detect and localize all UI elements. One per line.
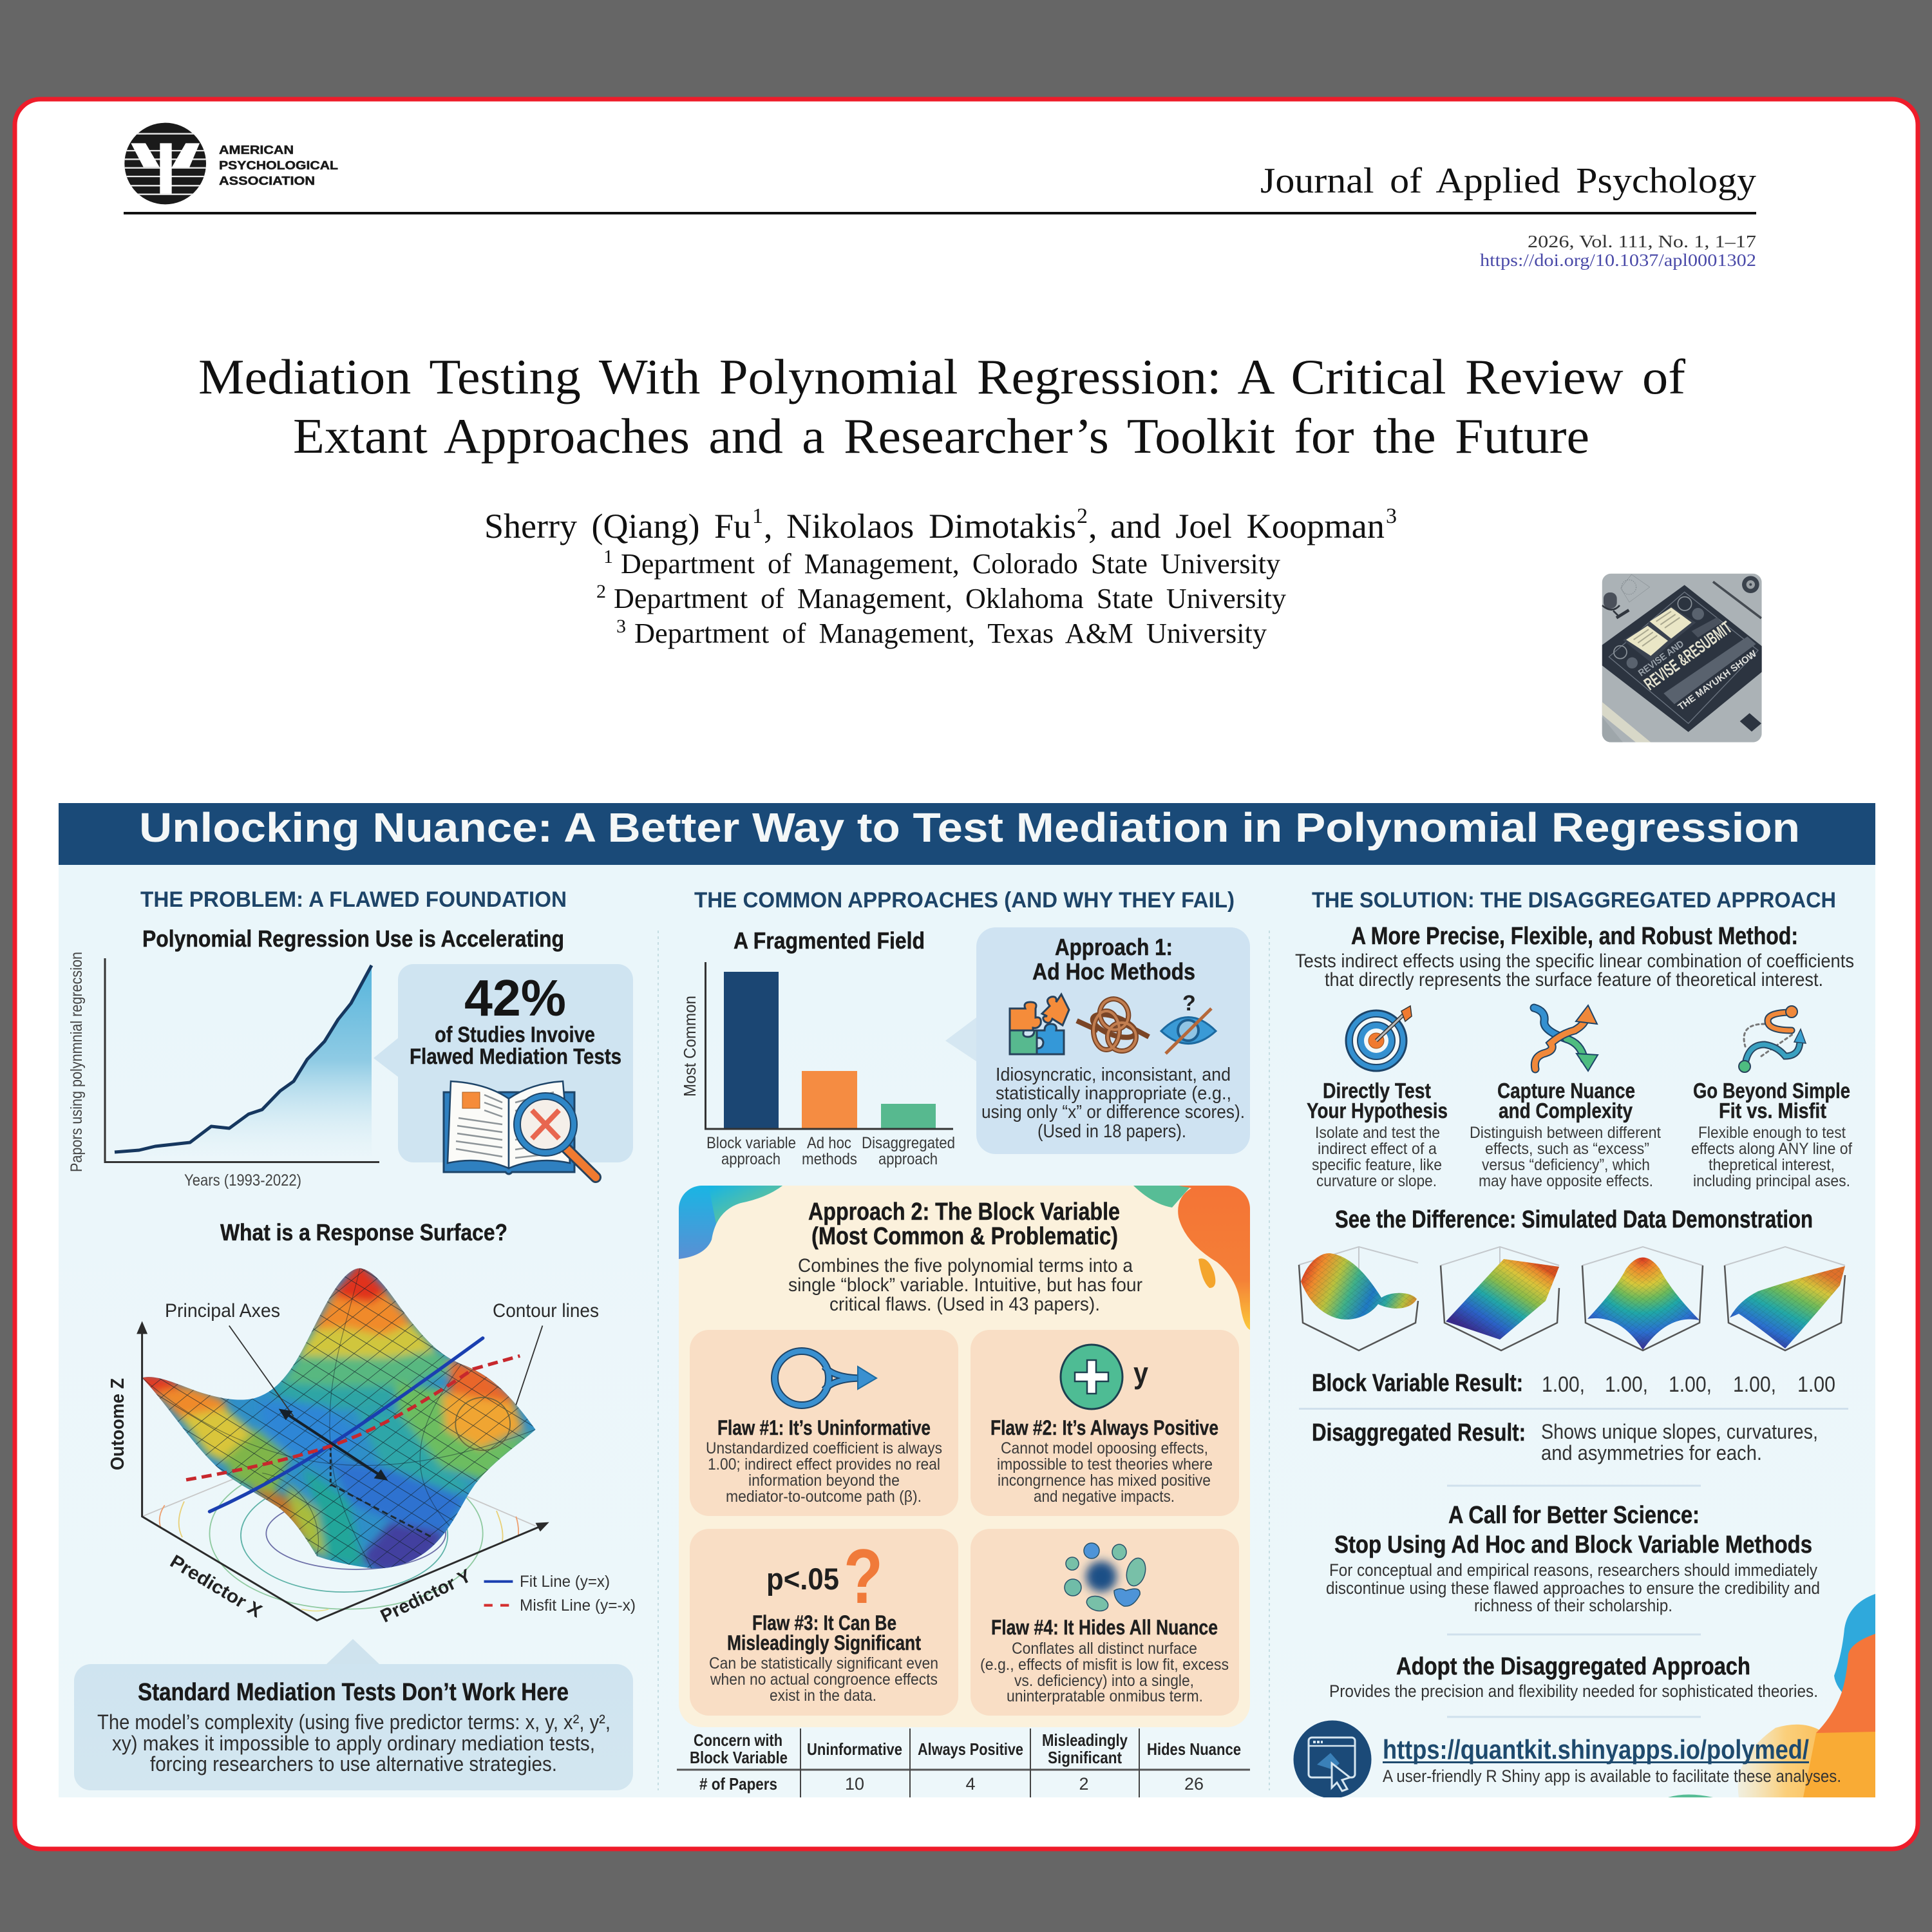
results: block variable: 1.00 — [1797, 1372, 1835, 1397]
heading: the problem: THE PROBLEM: A FLAWED FOUNDATION — [140, 887, 567, 912]
results: block variable — [1312, 1370, 1835, 1397]
line chart: polynomial regression use: Papors using polynmnial regrecsion — [68, 952, 86, 1172]
card: flaw 1 — [690, 1330, 958, 1516]
card: flaw 4: Flaw #4: It Hides All Nuance — [991, 1616, 1218, 1639]
table: concerns with block variable: Uninformative — [807, 1739, 902, 1759]
text block: a call for better science: richness of their scholarship. — [1474, 1596, 1672, 1615]
icon: p<.05 question mark: p<.05 — [766, 1562, 839, 1596]
article title: Extant Approaches and a Researcher’s Toolkit for the Future — [293, 408, 1589, 464]
callout: standard mediation tests: Standard Mediation Tests Don’t Work Here — [138, 1679, 569, 1706]
panel: approach 2: Approach 2: The Block Variable — [808, 1198, 1120, 1226]
icon: tangled knot — [1077, 995, 1149, 1051]
benefit: capture nuance: Distinguish between different — [1470, 1124, 1661, 1142]
bar chart: a fragmented field: Ad hoc — [807, 1134, 851, 1152]
intro text: that directly represents the surface feature of theoretical interest. — [1325, 969, 1823, 990]
chart: 3D response surface: Predictor X — [166, 1551, 266, 1622]
results: disaggregated: Shows unique slopes, curvatures, — [1541, 1420, 1818, 1443]
card: flaw 1: 1.00; indirect effect provides no real — [708, 1455, 940, 1473]
benefit: directly test: curvature or slope. — [1316, 1172, 1437, 1190]
icon: plus sign with y: y — [1133, 1356, 1148, 1390]
callout: 42%: 42% — [464, 969, 566, 1027]
callout: 42%: Flawed Mediation Tests — [410, 1045, 621, 1069]
bar chart: a fragmented field: Most Common — [680, 996, 699, 1097]
panel: approach 2 — [679, 1186, 1250, 1727]
icon: crossing arrows — [1534, 1005, 1598, 1071]
text block: adopt the disaggregated approach: Provides the precision and flexibility needed for sophisticated theories. — [1329, 1681, 1818, 1701]
icon: p<.05 question mark — [766, 1533, 883, 1620]
table: concerns with block variable: Misleadingly — [1042, 1730, 1128, 1750]
journal name: Journal of Applied Psychology — [1260, 161, 1756, 201]
text block: a call for better science — [1326, 1502, 1820, 1615]
benefit: go beyond: effects along ANY line of — [1691, 1140, 1852, 1158]
callout: approach 1: Idiosyncratic, inconsistant, and — [996, 1065, 1231, 1085]
card: flaw 4: (e.g., effects of misfit is low fit, excess — [980, 1656, 1229, 1674]
volume line: 2026, Vol. 111, No. 1, 1–17 — [1528, 232, 1756, 251]
benefit: capture nuance — [1470, 1005, 1661, 1190]
benefit: capture nuance: Capture Nuance — [1497, 1079, 1635, 1103]
authors: 3 — [1386, 504, 1397, 528]
icon: target with arrow — [1346, 1006, 1412, 1071]
callout: approach 1: using only “x” or difference scores). — [981, 1102, 1245, 1122]
card: flaw 3: Misleadingly Significant — [727, 1631, 921, 1654]
panel: the problem — [68, 887, 636, 1790]
callout: standard mediation tests — [74, 1639, 633, 1790]
heading: see the difference: See the Difference: Simulated Data Demonstration — [1335, 1206, 1813, 1233]
callout: standard mediation tests: xy) makes it impossible to apply ordinary mediation tests, — [112, 1732, 595, 1755]
card: flaw 4: vs. deficiency) into a single, — [1014, 1672, 1194, 1690]
decoration: bottom-right colour blobs — [1668, 1594, 1875, 1797]
table: concerns with block variable: Always Positive — [918, 1739, 1023, 1759]
results: block variable: 1.00, — [1542, 1372, 1585, 1397]
results: block variable: 1.00, — [1733, 1372, 1776, 1397]
panel: approach 2: Combines the five polynomial terms into a — [798, 1255, 1133, 1276]
card: flaw 1: Unstandardized coefficient is always — [706, 1439, 942, 1457]
card: flaw 4 — [971, 1529, 1239, 1716]
table: concerns with block variable — [677, 1728, 1250, 1797]
callout: approach 1 — [945, 927, 1250, 1154]
icon: curved paths — [1739, 1006, 1806, 1072]
authors: , — [1088, 507, 1097, 545]
logo: American Psychological Association: ASSOCIATION — [219, 175, 315, 187]
callout: standard mediation tests: The model’s complexity (using five predictor terms: x, y, x², y², — [97, 1710, 611, 1734]
bar chart: a fragmented field — [680, 927, 955, 1168]
bar chart: a fragmented field: methods — [802, 1150, 857, 1168]
table: concerns with block variable: 2 — [1079, 1774, 1089, 1794]
icon: plus sign with y — [1061, 1345, 1148, 1409]
affiliations — [596, 546, 1286, 649]
logo: American Psychological Association: AMERICAN — [219, 144, 294, 156]
benefit: capture nuance: may have opposite effects. — [1479, 1172, 1653, 1190]
heading: the solution: THE SOLUTION: THE DISAGGREGATED APPROACH — [1312, 888, 1836, 913]
benefit: directly test: Your Hypothesis — [1307, 1099, 1448, 1122]
results: disaggregated: and asymmetries for each. — [1541, 1441, 1762, 1464]
text block: a call for better science: A Call for Better Science: — [1448, 1502, 1700, 1529]
text block: a call for better science: For conceptual and empirical reasons, researchers should immediately — [1329, 1560, 1817, 1580]
intro text — [1295, 923, 1854, 990]
benefit: directly test: Isolate and test the — [1315, 1124, 1440, 1142]
card: flaw 1: mediator-to-outcome path (β). — [726, 1488, 922, 1506]
text block: adopt the disaggregated approach — [1329, 1653, 1818, 1701]
card: flaw 2: incongrnence has mixed positive — [998, 1472, 1211, 1490]
callout: approach 1: (Used in 18 papers). — [1037, 1121, 1186, 1142]
card: flaw 2 — [971, 1330, 1239, 1516]
panel: the common approaches — [677, 888, 1250, 1797]
affiliations: Department of Management, Oklahoma State University — [614, 583, 1286, 614]
benefit: capture nuance: and Complexity — [1499, 1099, 1633, 1122]
icon: blurred nuance blobs — [1065, 1543, 1148, 1613]
line chart: polynomial regression use: Years (1993-2022) — [184, 1171, 301, 1189]
chart: 3D response surface: Contour lines — [493, 1300, 599, 1321]
callout: approach 1: Ad Hoc Methods — [1032, 958, 1195, 985]
card: flaw 3: exist in the data. — [770, 1687, 876, 1705]
card: flaw 2: impossible to test theories where — [997, 1455, 1213, 1473]
intro text: A More Precise, Flexible, and Robust Method: — [1351, 923, 1798, 950]
chart: 3D response surface: Principal Axes — [165, 1300, 280, 1321]
benefit: capture nuance: versus “deficiency”, which — [1482, 1156, 1650, 1174]
panel: approach 2: (Most Common & Problematic) — [811, 1223, 1118, 1250]
benefit: go beyond — [1691, 1006, 1852, 1190]
article title: Mediation Testing With Polynomial Regression: A Critical Review of — [198, 349, 1685, 404]
chart: 3D response surface — [108, 1262, 636, 1627]
affiliations: Department of Management, Colorado State University — [621, 548, 1280, 580]
chart: simulated surface 3 — [1582, 1247, 1703, 1350]
affiliations: 3 — [616, 616, 626, 637]
podcast cover image: REVISE &RESUBMIT — [1640, 617, 1736, 694]
benefit: directly test: Directly Test — [1323, 1079, 1431, 1103]
article title — [198, 349, 1685, 464]
benefit: go beyond: Flexible enough to test — [1698, 1124, 1846, 1142]
benefit: directly test: indirect effect of a — [1318, 1140, 1437, 1158]
results: disaggregated — [1312, 1419, 1818, 1464]
benefit: go beyond: including principal ases. — [1693, 1172, 1850, 1190]
infographic — [59, 803, 1875, 1798]
authors: Nikolaos Dimotakis — [786, 507, 1076, 545]
journal header — [122, 120, 1756, 270]
bar chart: a fragmented field: approach — [878, 1150, 938, 1168]
icon: crossed-out eye: ? — [1182, 991, 1196, 1016]
line chart: polynomial regression use — [68, 952, 379, 1189]
podcast cover image: THE MAYUKH SHOW — [1676, 649, 1759, 713]
card: flaw 4: Conflates all distinct nurface — [1012, 1640, 1197, 1658]
text block: a call for better science: Stop Using Ad Hoc and Block Variable Methods — [1334, 1531, 1812, 1558]
link: shiny app — [1383, 1734, 1841, 1786]
logo: American Psychological Association: PSYCHOLOGICAL — [219, 159, 338, 172]
header rule — [124, 212, 1756, 214]
icon: p<.05 question mark: ? — [844, 1533, 883, 1620]
chart: 3D response surface: Misfit Line (y=-x) — [520, 1596, 636, 1615]
benefit: directly test — [1307, 1006, 1448, 1190]
chart: simulated surface 4 — [1725, 1247, 1845, 1350]
table: concerns with block variable: Concern with — [694, 1730, 782, 1750]
benefit: go beyond: Fit vs. Misfit — [1719, 1099, 1826, 1122]
benefit: directly test: specific feature, like — [1312, 1156, 1442, 1174]
callout: approach 1: Approach 1: — [1055, 934, 1173, 960]
card: flaw 2: Cannot model opoosing effects, — [1001, 1439, 1208, 1457]
icon: loop with arrow — [775, 1351, 876, 1405]
podcast cover image: REVISE AND — [1636, 639, 1686, 679]
bar chart: a fragmented field: approach — [721, 1150, 781, 1168]
card: flaw 4: uninterpratable onmibus term. — [1007, 1687, 1203, 1705]
card: flaw 3 — [690, 1529, 958, 1716]
bar chart: a fragmented field: Block variable — [706, 1134, 796, 1152]
authors: 1 — [752, 504, 763, 528]
affiliations: 2 — [596, 581, 606, 602]
results: block variable: 1.00, — [1605, 1372, 1648, 1397]
header banner — [59, 803, 1875, 865]
card: flaw 2: Flaw #2: It’s Always Positive — [990, 1416, 1218, 1439]
card: flaw 2: and negative impacts. — [1034, 1488, 1175, 1506]
card: flaw 3: Can be statistically significant even — [709, 1654, 938, 1672]
table: concerns with block variable: 10 — [845, 1774, 864, 1794]
icon: puzzle pieces — [1010, 994, 1069, 1054]
heading: response surface: What is a Response Surface? — [220, 1219, 507, 1245]
authors — [484, 504, 1397, 545]
text block: adopt the disaggregated approach: Adopt the Disaggregated Approach — [1396, 1653, 1750, 1680]
authors: , — [764, 507, 773, 545]
panel: the solution — [1293, 888, 1875, 1798]
authors: and Joel Koopman — [1110, 507, 1385, 545]
chart title: Polynomial Regression Use is Accelerating — [142, 925, 564, 952]
authors: 2 — [1077, 504, 1088, 528]
results: disaggregated: Disaggregated Result: — [1312, 1419, 1526, 1446]
table: concerns with block variable: 26 — [1184, 1774, 1204, 1794]
affiliations: 1 — [603, 546, 613, 567]
callout: approach 1: statistically inappropriate (e.g., — [996, 1083, 1231, 1104]
icon: open book with magnifier — [444, 1081, 596, 1177]
table: concerns with block variable: # of Papers — [699, 1774, 777, 1794]
link: shiny app: https://quantkit.shinyapps.io/polymed/ — [1383, 1734, 1809, 1765]
chart: simulated surface 2 — [1441, 1247, 1559, 1350]
podcast cover image — [1602, 574, 1765, 743]
table: concerns with block variable: Block Variable — [690, 1748, 788, 1767]
icon: browser with cursor — [1293, 1721, 1372, 1798]
benefit: capture nuance: effects, such as “excess” — [1485, 1140, 1649, 1158]
heading: the common approaches: THE COMMON APPROACHES (AND WHY THEY FAIL) — [694, 888, 1235, 913]
callout: 42% — [374, 964, 633, 1177]
chart: 3D response surface: Predictor Y — [377, 1566, 475, 1627]
results: block variable: 1.00, — [1669, 1372, 1712, 1397]
results: block variable: Block Variable Result: — [1312, 1370, 1523, 1397]
header banner: Unlocking Nuance: A Better Way to Test Mediation in Polynomial Regression — [139, 804, 1800, 851]
table: concerns with block variable: Significant — [1048, 1748, 1122, 1767]
text block: a call for better science: discontinue using these flawed approaches to ensure the credibility and — [1326, 1578, 1820, 1598]
chart: 3D response surface: Fit Line (y=x) — [520, 1573, 610, 1591]
doi: https://doi.org/10.1037/apl0001302 — [1480, 251, 1756, 270]
benefit: go beyond: thepretical interest, — [1709, 1156, 1835, 1174]
table: concerns with block variable: Hides Nuance — [1147, 1739, 1241, 1759]
bar chart: a fragmented field: A Fragmented Field — [734, 927, 925, 954]
chart: 3D response surface: Outoome Z — [108, 1378, 128, 1470]
callout: standard mediation tests: forcing researchers to use alternative strategies. — [150, 1752, 557, 1776]
logo: American Psychological Association — [122, 120, 338, 206]
card: flaw 3: when no actual congroence effects — [710, 1671, 938, 1689]
card: flaw 1: Flaw #1: It’s Uninformative — [717, 1416, 931, 1439]
chart: simulated surface 1 — [1299, 1247, 1418, 1350]
authors: Sherry (Qiang) Fu — [484, 507, 751, 545]
panel: approach 2: critical flaws. (Used in 43 papers). — [829, 1294, 1100, 1315]
card: flaw 3: Flaw #3: It Can Be — [752, 1611, 896, 1634]
link: shiny app: A user-friendly R Shiny app is available to facilitate these analyses. — [1383, 1766, 1841, 1786]
panel: approach 2: single “block” variable. Intuitive, but has four — [788, 1274, 1142, 1296]
bar chart: a fragmented field: Disaggregated — [862, 1134, 955, 1152]
icon: crossed-out eye — [1161, 991, 1216, 1054]
affiliations: Department of Management, Texas A&M University — [634, 618, 1267, 649]
intro text: Tests indirect effects using the specific linear combination of coefficients — [1295, 951, 1854, 972]
callout: 42%: of Studies Invoive — [435, 1023, 595, 1047]
card: flaw 1: information beyond the — [748, 1472, 900, 1490]
benefit: go beyond: Go Beyond Simple — [1693, 1079, 1850, 1103]
table: concerns with block variable: 4 — [965, 1774, 976, 1794]
